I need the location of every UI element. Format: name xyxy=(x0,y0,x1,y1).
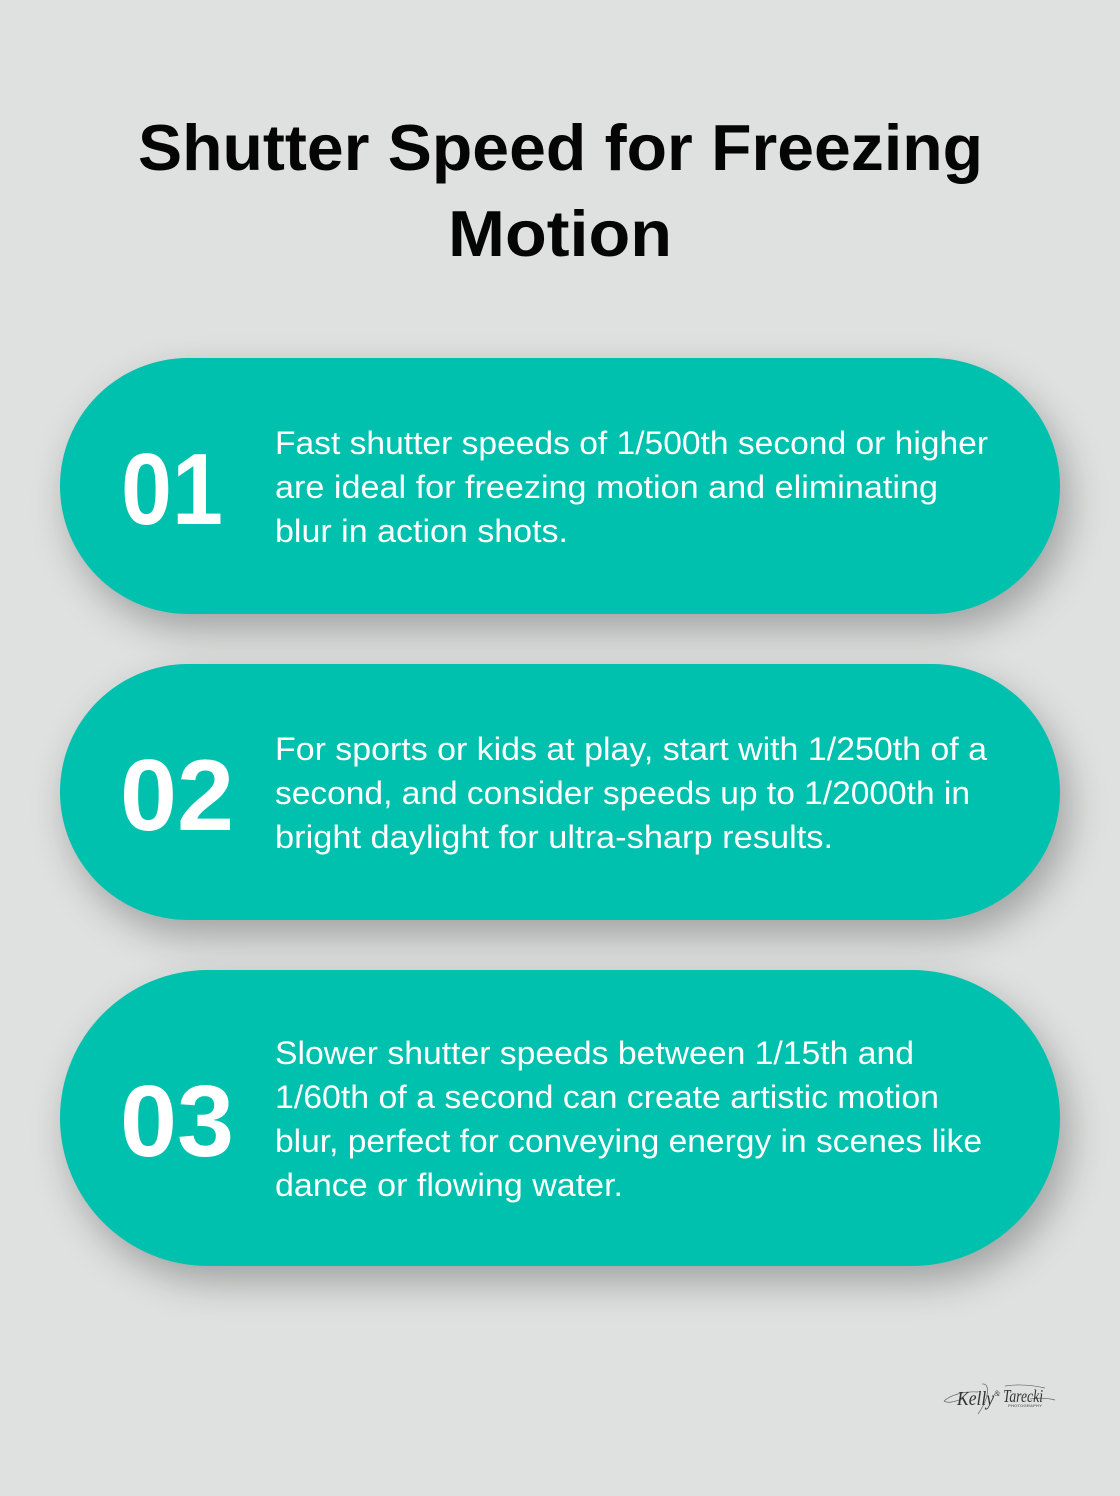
step number 02: 02 xyxy=(120,740,234,852)
step 01 text: Fast shutter speeds of 1/500th second or higher xyxy=(275,425,988,461)
logo: signature: Kelly xyxy=(956,1388,994,1410)
step 02 text: bright daylight for ultra-sharp results. xyxy=(275,819,833,855)
logo: signature: & xyxy=(994,1389,1001,1398)
step 01 text: blur in action shots. xyxy=(275,513,568,549)
step number 03: 03 xyxy=(120,1066,234,1178)
title xyxy=(138,111,983,270)
logo: signature xyxy=(944,1384,1055,1414)
step 01 text xyxy=(275,425,988,549)
step 03 text: 1/60th of a second can create artistic motion xyxy=(275,1079,939,1115)
logo: signature: Tarecki xyxy=(1003,1386,1043,1406)
title: Motion xyxy=(448,197,672,270)
logo: signature: PHOTOGRAPHY xyxy=(1008,1404,1043,1408)
step 03 text: Slower shutter speeds between 1/15th and xyxy=(275,1035,914,1071)
step 03 text: dance or flowing water. xyxy=(275,1167,623,1203)
title: Shutter Speed for Freezing xyxy=(138,111,983,184)
step 02 text: For sports or kids at play, start with 1/250th of a xyxy=(275,731,987,767)
step 01 text: are ideal for freezing motion and eliminating xyxy=(275,469,938,505)
step number 01: 01 xyxy=(121,434,223,546)
step 02 text: second, and consider speeds up to 1/2000th in xyxy=(275,775,970,811)
panel: step 01 xyxy=(60,358,1060,614)
step 02 text xyxy=(275,731,987,855)
step 03 text xyxy=(275,1035,982,1203)
panel: step 02 xyxy=(60,664,1060,920)
step 03 text: blur, perfect for conveying energy in scenes like xyxy=(275,1123,982,1159)
panel: step 03 xyxy=(60,970,1060,1266)
